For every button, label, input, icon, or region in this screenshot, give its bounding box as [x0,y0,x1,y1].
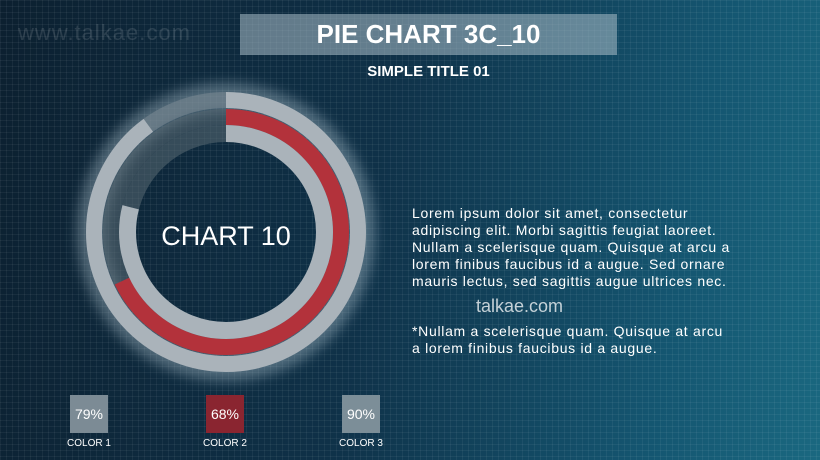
legend item 3 [339,395,383,449]
body text [412,205,730,289]
body text: adipiscing elit. Morbi sagittis feugiat laoreet. [412,222,716,238]
body text: lorem finibus faucibus id a augue. Sed ornare [412,256,725,272]
legend [67,395,383,449]
note text: a lorem finibus faucibus id a augue. [412,340,657,356]
legend item 1 [67,395,111,449]
note text [412,323,723,356]
body text: mauris lectus, sed sagittis augue ultrices nec. [412,273,727,289]
legend item 1: COLOR 1 [67,438,111,449]
watermark center: talkae.com [476,296,563,316]
legend item 2: 68% [211,406,239,422]
legend item 2: COLOR 2 [203,438,247,449]
donut chart: CHART 10 [161,221,291,251]
donut chart [70,76,382,388]
watermark: www.talkae.com [18,20,191,45]
legend item 3: 90% [347,406,375,422]
title bar [240,14,617,55]
subtitle: SIMPLE TITLE 01 [367,63,490,80]
note text: *Nullam a scelerisque quam. Quisque at arcu [412,323,723,339]
legend item 3: COLOR 3 [339,438,383,449]
legend item 2 [203,395,247,449]
body text: Lorem ipsum dolor sit amet, consectetur [412,205,688,221]
title bar: PIE CHART 3C_10 [317,19,540,49]
legend item 1: 79% [75,406,103,422]
body text: Nullam a scelerisque quam. Quisque at arcu a [412,239,730,255]
